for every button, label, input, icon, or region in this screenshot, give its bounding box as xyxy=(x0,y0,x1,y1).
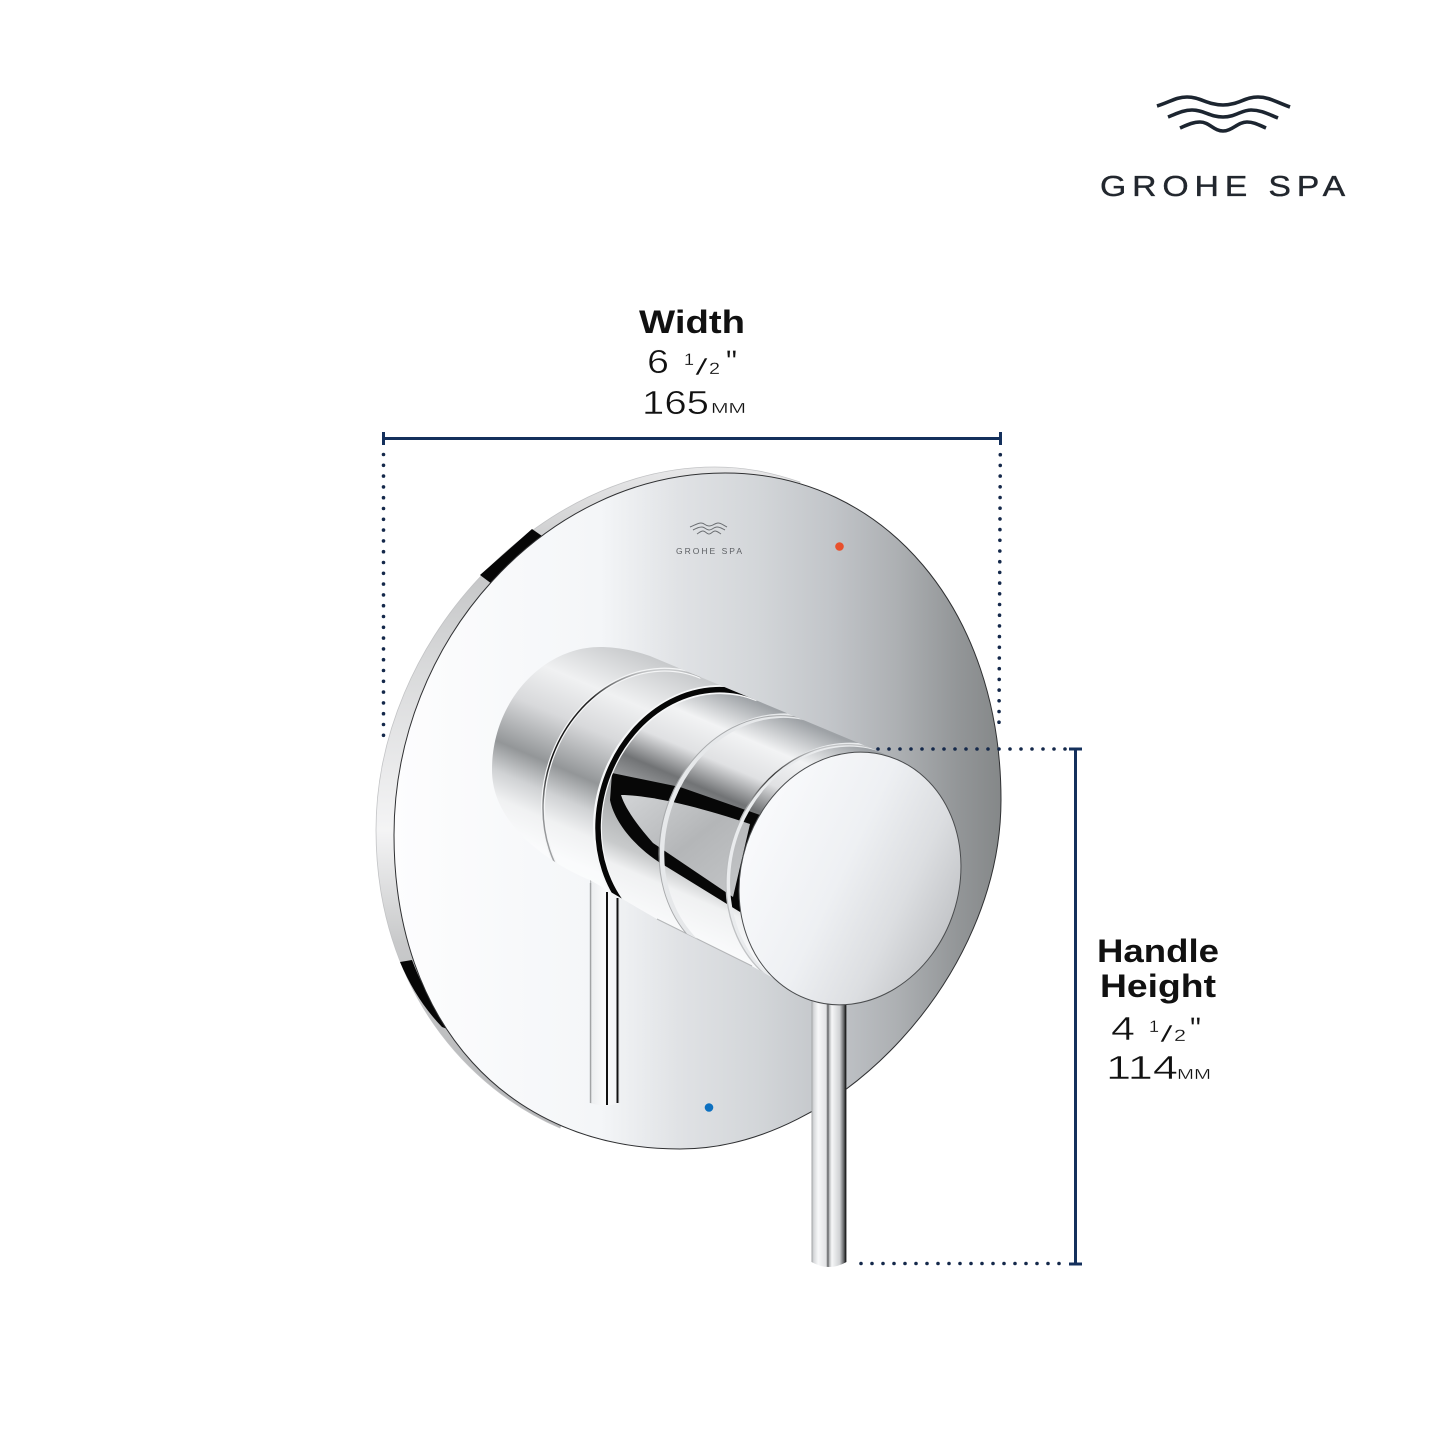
rear lever xyxy=(590,880,620,1106)
width label: 1 xyxy=(684,350,694,369)
width label: / xyxy=(695,354,709,380)
handle height label: 4 xyxy=(1111,1010,1135,1047)
cylinder lower edge xyxy=(657,919,752,966)
handle lever xyxy=(812,998,846,1267)
handle height label: 114 xyxy=(1106,1049,1178,1086)
handle height dimension line xyxy=(861,749,1082,1264)
front cylinder sections xyxy=(602,694,895,970)
handle height label: Height xyxy=(1100,968,1216,1004)
wall plate rim xyxy=(376,467,800,1128)
icon: three waves xyxy=(1157,97,1290,131)
width label: 2 xyxy=(709,359,720,378)
handle height label: 2 xyxy=(1174,1026,1186,1045)
handle face xyxy=(707,723,993,1034)
width dimension line xyxy=(384,432,1000,738)
handle height label: 1 xyxy=(1149,1017,1159,1036)
hot indicator dot xyxy=(835,542,844,551)
handle height label xyxy=(1097,933,1219,1086)
handle height label: " xyxy=(1190,1011,1201,1047)
brand logo: GROHE SPA xyxy=(1100,97,1351,203)
width label: 6 xyxy=(647,343,669,380)
wall plate xyxy=(394,473,1001,1149)
cold indicator dot xyxy=(705,1103,713,1112)
width label: " xyxy=(726,344,737,380)
width label xyxy=(639,304,746,421)
plate logo: GROHE SPA xyxy=(676,546,742,556)
section rings xyxy=(543,670,886,990)
width label: Width xyxy=(639,304,745,340)
handle height label: / xyxy=(1160,1021,1174,1047)
rear cylinder sections xyxy=(492,647,897,993)
handle cylinder xyxy=(492,647,897,997)
width label: MM xyxy=(711,400,746,417)
plate logo xyxy=(676,523,742,556)
logo wordmark: GROHE SPA xyxy=(1100,171,1351,203)
dark reflection band xyxy=(610,773,760,912)
handle height label: Handle xyxy=(1097,933,1219,969)
handle height label: MM xyxy=(1177,1066,1211,1083)
width label: 165 xyxy=(642,384,709,421)
product: shower valve trim xyxy=(376,467,1001,1267)
